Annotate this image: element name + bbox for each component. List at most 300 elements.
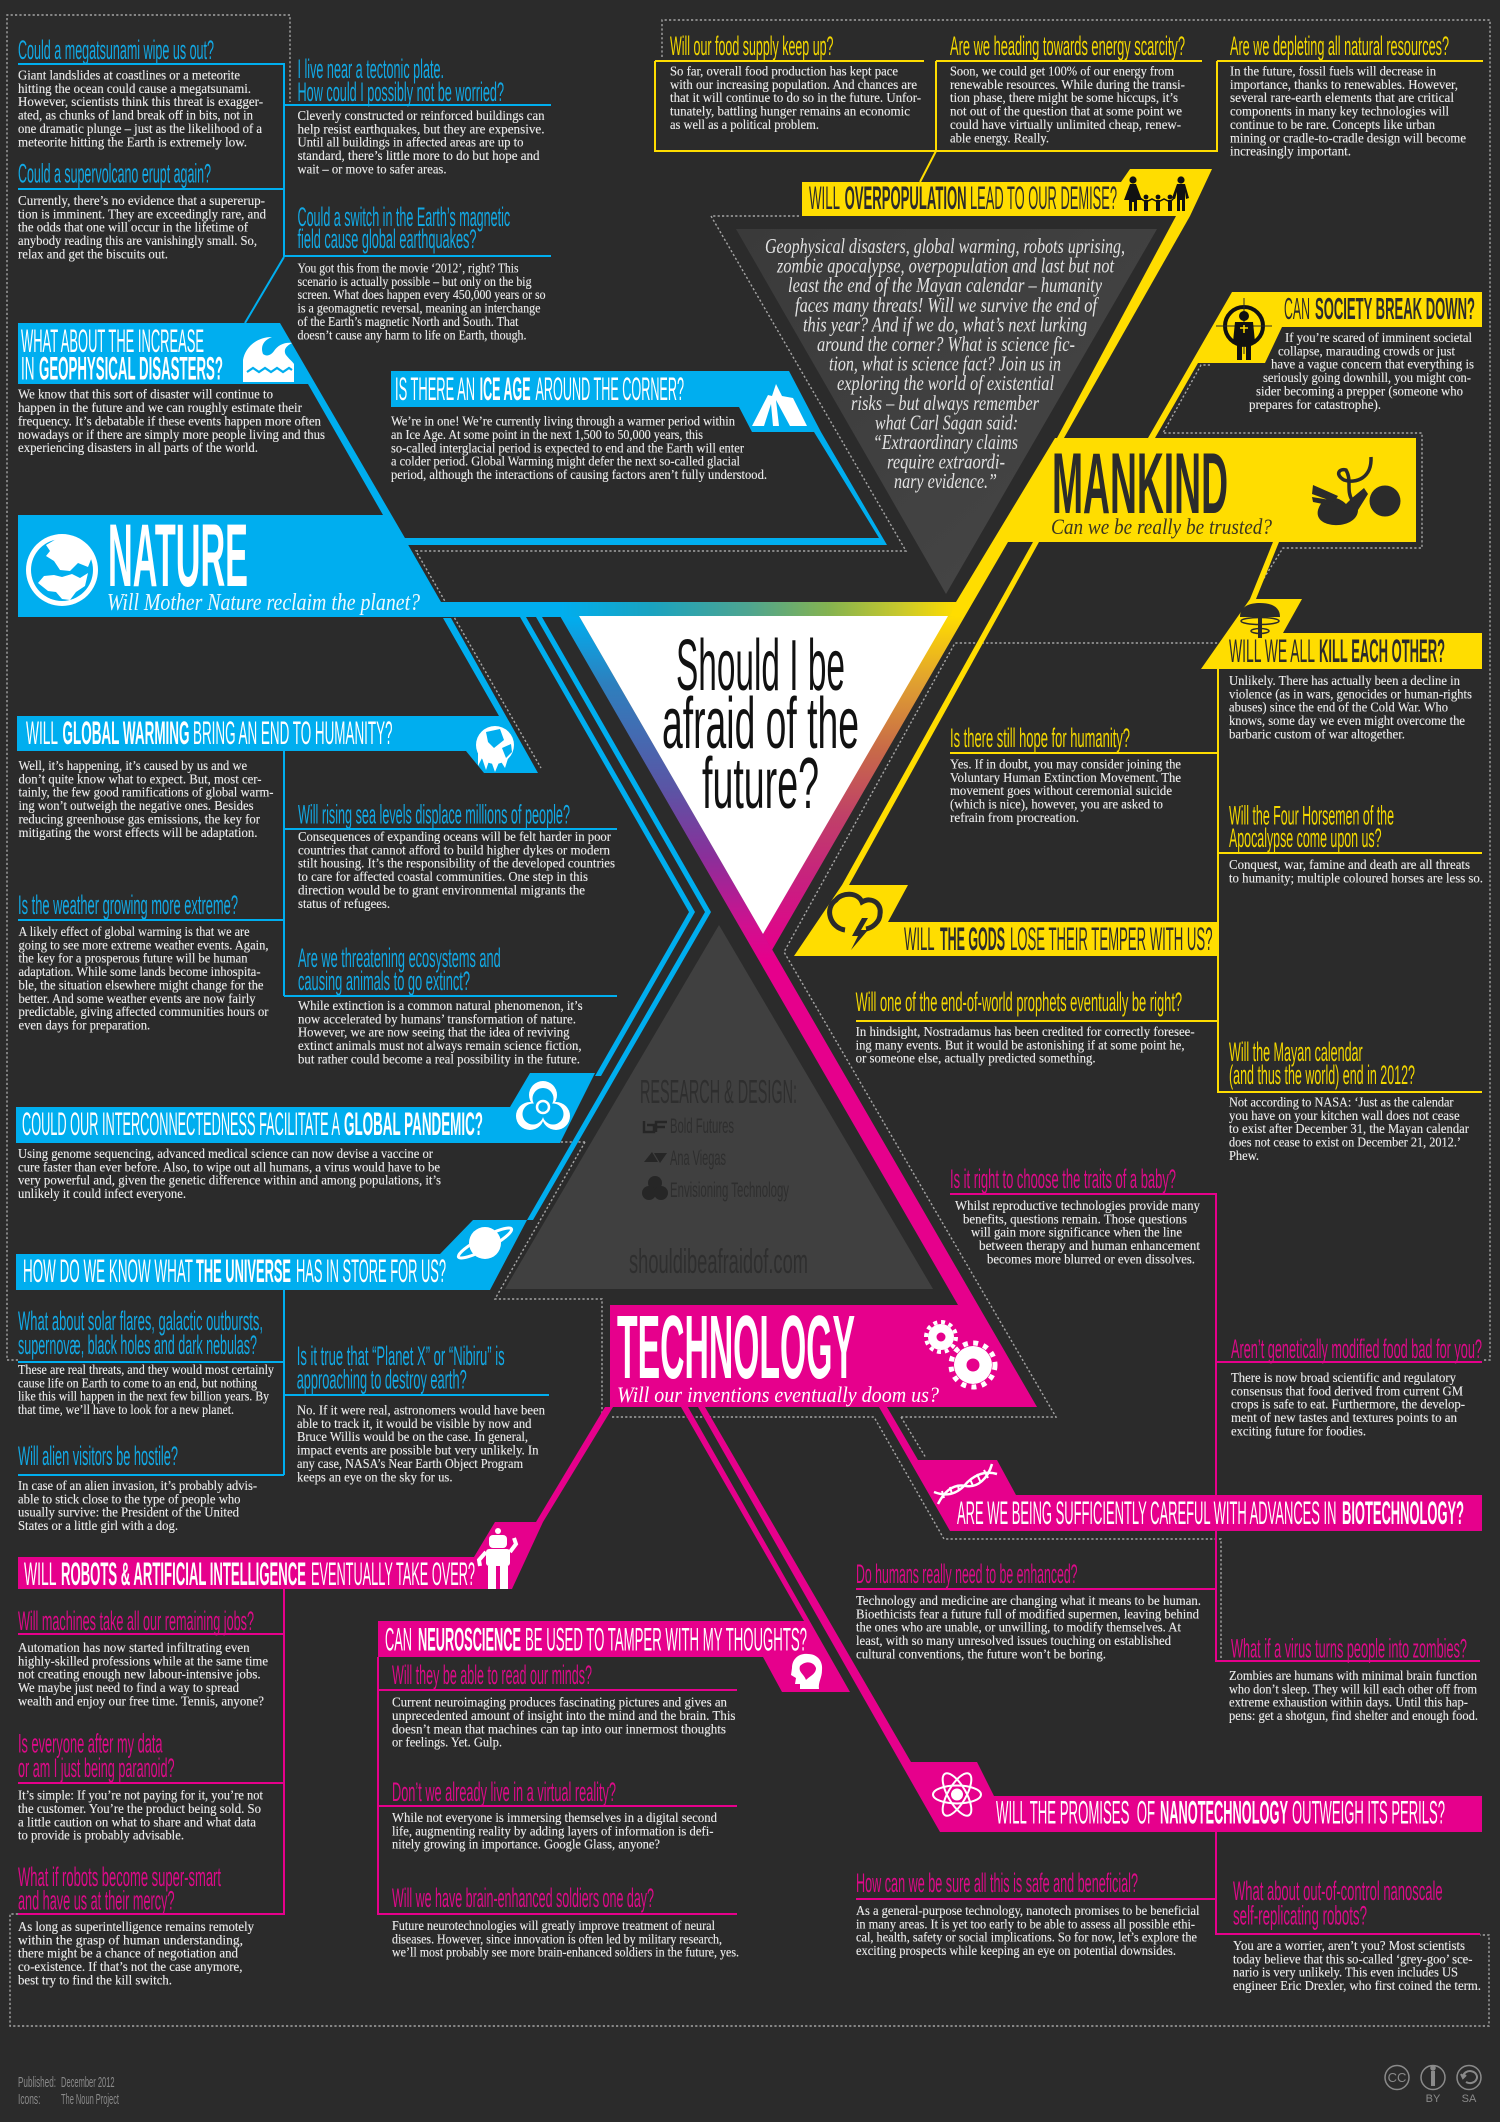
panel: zombies: extreme exhaustion within days. Until this hap- (1229, 1695, 1468, 1710)
panel: hope for humanity: Yes. If in doubt, you may consider joining the (950, 756, 1181, 772)
panel: robots: EVENTUALLY TAKE OVER? (311, 1556, 475, 1592)
panel: brain-enhanced soldiers (392, 1883, 739, 1960)
panel: tectonic plate: wait – or move to safer areas. (298, 161, 446, 176)
panel: rising sea levels: Consequences of expanding oceans will be felt harder in poor (298, 829, 612, 844)
panel: remaining jobs: highly-skilled professions while at the same time (18, 1653, 268, 1668)
panel: ice age: We’re in one! We’re currently living through a warmer period within (391, 414, 735, 429)
panel: remaining jobs: We maybe just need to find a way to spread (18, 1680, 239, 1695)
panel: ice age (391, 371, 887, 545)
panel: baby traits: benefits, questions remain. Those questions (963, 1211, 1187, 1226)
panel: hope for humanity: movement goes without ceremonial suicide (950, 783, 1172, 798)
panel: food supply: So far, overall food production has kept pace (670, 64, 898, 78)
panel: magnetic field switch: field cause global earthquakes? (298, 224, 476, 254)
icon: brain head (791, 1654, 822, 1689)
panel: solar flares (18, 1306, 274, 1417)
intro text: this year? And if we do, what’s next lurking (803, 312, 1087, 336)
panel: natural resources: importance, thanks to renewables. However, (1230, 77, 1458, 92)
panel: alien visitors: Will alien visitors be hostile? (18, 1441, 178, 1471)
panel: could a supervolcano erupt again: Could a supervolcano erupt again? (18, 158, 211, 188)
icon: envisioning technology (642, 1176, 668, 1200)
panel: could a megatsunami wipe us out (18, 35, 263, 149)
panel: energy scarcity (950, 31, 1185, 145)
panel: solar flares: What about solar flares, galactic outbursts, (18, 1306, 263, 1336)
footer: creative commons icons (1385, 2066, 1481, 2105)
icon: globe (26, 534, 98, 606)
text: BE USED TO TAMPER WITH MY THOUGHTS? (525, 1622, 807, 1658)
panel: rising sea levels: to care for affected coastal communities. One step in this (298, 869, 588, 884)
panel: virtual reality (392, 1777, 717, 1852)
panel: zombies: who don’t sleep. They will kill each other off from (1229, 1681, 1478, 1696)
panel: zombies (1229, 1634, 1478, 1723)
panel: my data: It’s simple: If you’re not paying for it, you’re not (18, 1788, 263, 1803)
panel: energy scarcity: not out of the question that at some point we (950, 104, 1182, 119)
panel: mayan calendar: does not cease to exist on December 21, 2012.’ (1229, 1135, 1461, 1150)
panel: virtual reality: While not everyone is immersing themselves in a digital second (392, 1810, 717, 1825)
panel: hope for humanity: (which is nice), however, you are asked to (950, 797, 1163, 812)
panel: global warming: don’t quite know what to expect. But, most cer- (18, 771, 262, 786)
footer: creative commons icons: CC (1388, 2070, 1406, 2085)
panel: credits: Bold Futures (670, 1115, 734, 1138)
panel: safe and beneficial: in many areas. It is yet too early to be able to assess all possible ethi- (856, 1916, 1195, 1931)
central frame: gradient triangle (441, 602, 1037, 1407)
panel: could a megatsunami wipe us out: meteorite hitting the Earth is extremely low. (18, 134, 247, 149)
chevron strips from nature (520, 617, 711, 1220)
panel: overpopulation: OVERPOPULATION (845, 180, 967, 216)
icon: storm cloud (830, 894, 880, 950)
panel: virtual reality: life, augmenting reality by adding layers of information is defi- (392, 1823, 714, 1838)
panel: threatened ecosystems: causing animals to go extinct? (298, 966, 470, 996)
panel: natural resources: components in many key technologies will (1230, 104, 1449, 119)
intro text: zombie apocalypse, overpopulation and last but not (776, 254, 1115, 278)
intro text: Geophysical disasters, global warming, robots uprising, (765, 234, 1125, 258)
footer: publication info: December 2012 (61, 2074, 115, 2091)
panel: baby traits (950, 1164, 1482, 1495)
panel: virtual reality: Don’t we already live in a virtual reality? (392, 1777, 616, 1807)
panel: threatened ecosystems: but rather could become a real possibility in the future. (298, 1051, 580, 1066)
panel: planet x: Bruce Willis would be on the case. In general, (297, 1429, 528, 1444)
panel: food supply (670, 31, 921, 132)
panel: biotechnology (856, 1407, 1482, 1661)
central white triangle with title: future? (702, 744, 819, 824)
panel: technology banner: TECHNOLOGY (617, 1298, 855, 1398)
footer: publication info: Published: (18, 2074, 56, 2091)
panel: super-smart robots: best try to find the kill switch. (18, 1972, 172, 1987)
panel: brain-enhanced soldiers: diseases. However, since innovation is often led by military research, (392, 1931, 722, 1946)
panel: tectonic plate: Until all buildings in affected areas are up to (298, 135, 524, 150)
panel: magnetic field switch: Could a switch in the Earth’s magnetic (298, 202, 510, 232)
panel: threatened ecosystems: However, we are now seeing that the idea of reviving (298, 1025, 570, 1040)
panel: global pandemic: very powerful and, given the genetic difference within and among populations, it’s (18, 1173, 441, 1188)
panel: planet x: impact events are possible but very unlikely. In (297, 1443, 539, 1458)
panel: ice age: a colder period. Global Warming might defer the next so-called glacial (391, 454, 740, 469)
panel: rising sea levels: stilt housing. It’s the responsibility of the developed countries (298, 856, 615, 871)
panel: end-of-world prophets: ing many events. But it would be astonishing if at some point he, (856, 1037, 1185, 1052)
intro text: risks – but always remember (851, 391, 1040, 415)
panel: neuroscience (378, 1407, 850, 1914)
intro text: what Carl Sagan said: (875, 410, 1018, 434)
panel: genetically modified food: crops is safe to eat. Furthermore, the develop- (1231, 1397, 1465, 1412)
panel: super-smart robots (18, 1862, 254, 1987)
panel: remaining jobs: Automation has now started infiltrating even (18, 1640, 250, 1655)
panel: extreme weather: Is the weather growing more extreme? (18, 890, 238, 920)
panel: mayan calendar (1229, 1037, 1470, 1163)
panel: can society break down (1148, 291, 1482, 438)
panel: can society break down: seriously going downhill, you might con- (1263, 370, 1471, 385)
panel: the universe (16, 1220, 549, 1475)
panel: could a supervolcano erupt again (18, 158, 266, 261)
panel: tectonic plate: standard, there’s little more to do but hope and (298, 148, 540, 163)
panel: self-replicating robots: nario is very unlikely. This even includes US (1233, 1965, 1458, 1980)
panel: read our minds: Current neuroimaging produces fascinating pictures and gives an (392, 1695, 727, 1710)
panel: can society break down: If you’re scared of imminent societal (1285, 330, 1472, 345)
panel: extreme weather: A likely effect of global warming is that we are (18, 924, 250, 939)
panel: safe and beneficial: cal, health, safety or social implications. So for now, let’s explore the (856, 1930, 1197, 1945)
panel: food supply: with our increasing population. And chances are (670, 77, 917, 92)
panel: food supply: as well as a political problem. (670, 117, 819, 132)
panel: threatened ecosystems: extinct animals must not always remain science fiction, (298, 1038, 582, 1053)
icon: ice mountain (752, 384, 807, 426)
panel: geophysical disasters: IN (21, 350, 34, 386)
panel: planet x: any case, NASA’s Near Earth Object Program (297, 1456, 524, 1471)
panel: threatened ecosystems: While extinction is a common natural phenomenon, it’s (298, 998, 583, 1013)
panel: do humans need to be enhanced: Do humans really need to be enhanced? (856, 1559, 1078, 1589)
panel: hope for humanity: Is there still hope for humanity? (950, 723, 1130, 753)
panel: do humans need to be enhanced: Technology and medicine are changing what it means to be human. (856, 1593, 1201, 1608)
intro text: least the end of the Mayan calendar – humanity (788, 273, 1103, 297)
panel: ice age: an Ice Age. At some point in the next 1,500 to 50,000 years, this (391, 427, 703, 442)
icon: bold futures (644, 1121, 667, 1132)
panel: can society break down: collapse, marauding crowds or just (1278, 343, 1455, 358)
panel: tectonic plate: I live near a tectonic plate. (298, 54, 444, 84)
panel: do humans need to be enhanced: cultural conventions, the future won’t be boring. (856, 1646, 1106, 1661)
icon: mushroom cloud (1240, 603, 1280, 638)
panel: could a megatsunami wipe us out: hitting the ocean could cause a megatsunami. (18, 81, 251, 96)
panel: read our minds (392, 1660, 736, 1750)
panel: rising sea levels (298, 800, 615, 911)
panel: brain-enhanced soldiers: Future neurotechnologies will greatly improve treatment of neural (392, 1918, 715, 1933)
panel: read our minds: doesn’t mean that machines can tap into our innermost thoughts (392, 1721, 726, 1736)
panel: natural resources: increasingly important. (1230, 144, 1351, 159)
panel: mankind banner (842, 436, 1416, 885)
panel: will we all kill each other (856, 599, 1482, 1092)
panel: baby traits: Whilst reproductive technologies provide many (955, 1198, 1200, 1213)
panel: natural resources (1230, 31, 1466, 159)
panel: magnetic field switch: scenario is actually possible – but only on the big (298, 274, 532, 289)
panel: super-smart robots: there might be a chance of negotiation and (18, 1946, 238, 1961)
panel: ice age: AROUND THE CORNER? (536, 371, 684, 407)
panel: geophysical disasters: GEOPHYSICAL DISASTERS? (39, 350, 223, 386)
panel: self-replicating robots: today believe that this so-called ‘grey-goo’ sce- (1233, 1951, 1472, 1966)
panel: geophysical disasters: frequency. It’s debatable if these events happen more often (18, 413, 321, 428)
credits triangle background (505, 925, 933, 1289)
panel: extreme weather: the key for a prosperous future will be human (18, 951, 248, 966)
panel: extreme weather: predictable, giving affected communities hours or (18, 1004, 269, 1019)
text: Are we heading towards energy scarcity? (950, 31, 1185, 61)
panel: will we all kill each other: violence (as in wars, genocides or human-rights (1229, 686, 1472, 701)
panel: planet x: approaching to destroy earth? (297, 1364, 467, 1394)
panel: mayan calendar: you have on your kitchen wall does not cease (1229, 1108, 1460, 1123)
panel: my data (18, 1729, 263, 1843)
panel: energy scarcity: able energy. Really. (950, 130, 1049, 145)
icon: dna (934, 1464, 997, 1504)
panel: remaining jobs: wealth and enjoy our free time. Tennis, anyone? (18, 1693, 264, 1708)
panel: magnetic field switch: doesn’t cause any harm to life on Earth, though. (298, 327, 526, 342)
panel: super-smart robots: and have us at their mercy? (18, 1885, 174, 1915)
panel: safe and beneficial: exciting prospects while keeping an eye on potential downsides. (856, 1943, 1176, 1958)
panel: the universe: HAS IN STORE FOR US? (296, 1253, 446, 1289)
panel: safe and beneficial: As a general-purpose technology, nanotech promises to be beneficial (856, 1903, 1200, 1918)
panel: zombies: pens: get a shotgun, find shelter and enough food. (1229, 1708, 1478, 1723)
panel: genetically modified food (1231, 1334, 1482, 1438)
panel: planet x: keeps an eye on the sky for us. (297, 1469, 452, 1484)
panel: do humans need to be enhanced (856, 1559, 1201, 1661)
panel: global warming: GLOBAL WARMING (62, 715, 190, 751)
panel: tectonic plate: help resist earthquakes, but they are expensive. (298, 121, 544, 136)
panel: nanotechnology: NANOTECHNOLOGY (1160, 1794, 1288, 1830)
intro text: around the corner? What is science fic- (817, 332, 1075, 356)
intro text: faces many threats! Will we survive the end of (795, 293, 1099, 317)
panel: global pandemic: COULD OUR INTERCONNECTEDNESS FACILITATE A (22, 1106, 340, 1142)
panel: geophysical disasters: experiencing disasters in all parts of the world. (18, 440, 258, 455)
panel: planet x: able to track it, it would be visible by now and (297, 1416, 532, 1431)
panel: the gods: WILL (904, 921, 935, 957)
panel: mankind banner: MANKIND (1052, 436, 1228, 532)
panel: genetically modified food: exciting future for foodies. (1231, 1423, 1366, 1438)
panel: geophysical disasters: nowadays or if there are simply more people living and thus (18, 427, 325, 442)
icon: fetus (1312, 457, 1400, 525)
panel: safe and beneficial: How can we be sure all this is safe and beneficial? (856, 1868, 1138, 1898)
panel: nature banner: NATURE (108, 505, 248, 605)
panel: threatened ecosystems (298, 943, 583, 1066)
panel: food supply: that it will continue to do so in the future. Unfor- (670, 90, 921, 105)
panel: global warming (17, 618, 617, 996)
panel: could a supervolcano erupt again: Currently, there’s no evidence that a supererup- (18, 193, 265, 208)
panel: will we all kill each other: barbaric custom of war altogether. (1229, 726, 1405, 741)
panel: hope for humanity: refrain from procreation. (950, 810, 1079, 825)
panel: could a megatsunami wipe us out: Giant landslides at coastlines or a meteorite (18, 68, 240, 82)
panel: threatened ecosystems: now accelerated by humans’ transformation of nature. (298, 1011, 576, 1026)
panel: genetically modified food: ment of new tastes and textures points to an (1231, 1410, 1457, 1425)
panel: extreme weather: ble, the situation elsewhere might change for the (18, 977, 264, 992)
panel: self-replicating robots: engineer Eric Drexler, who first coined the term. (1233, 1978, 1481, 1993)
panel: global warming: reducing greenhouse gas emissions, the key for (18, 811, 261, 826)
text: supernovæ, black holes and dark nebulas? (18, 1330, 257, 1360)
icon: target person (1216, 298, 1272, 360)
panel: extreme weather: adaptation. While some lands become inhospita- (18, 964, 260, 979)
panel: super-smart robots: within the grasp of human understanding, (18, 1932, 243, 1947)
panel: four horsemen (1229, 800, 1483, 885)
panel: technology banner (610, 1298, 1037, 1407)
panel: tectonic plate (298, 54, 545, 176)
icon: biohazard (516, 1081, 570, 1130)
panel: natural resources: mining or cradle-to-cradle design will become (1230, 130, 1466, 145)
icon: saturn (456, 1224, 514, 1262)
panel: global warming: tainly, the few good ramifications of global warm- (18, 785, 274, 800)
panel: brain-enhanced soldiers: Will we have brain-enhanced soldiers one day? (392, 1883, 654, 1913)
panel: magnetic field switch: You got this from the movie ‘2012’, right? This (298, 260, 518, 276)
panel: extreme weather (18, 890, 269, 1032)
panel: planet x: No. If it were real, astronomers would have been (297, 1402, 545, 1418)
panel: read our minds: or feelings. Yet. Gulp. (392, 1735, 502, 1750)
panel: self-replicating robots (1233, 1876, 1481, 1993)
panel: credits: Envisioning Technology (670, 1179, 789, 1202)
panel: food supply: tunately, battling hunger remains an economic (670, 104, 910, 119)
text: Will machines take all our remaining jobs? (18, 1606, 254, 1636)
footer: creative commons icons: BY (1426, 2093, 1441, 2105)
panel: the universe: THE UNIVERSE (196, 1253, 291, 1289)
intro text: “Extraordinary claims (873, 430, 1018, 454)
panel: will we all kill each other: WILL WE ALL (1229, 633, 1315, 669)
panel: end-of-world prophets: or someone else, actually predicted something. (856, 1051, 1096, 1066)
panel: could a megatsunami wipe us out: ated, as chunks of land break off in bits, not in (18, 108, 253, 123)
panel: global pandemic: GLOBAL PANDEMIC? (344, 1106, 483, 1142)
panel: natural resources: continue to be rare. Concepts like urban (1230, 117, 1435, 132)
panel: baby traits: will gain more significance when the line (971, 1225, 1182, 1240)
panel: my data: a little caution on what to share and what data (18, 1814, 256, 1829)
panel: my data: Is everyone after my data (18, 1729, 163, 1759)
panel: global warming: BRING AN END TO HUMANITY? (193, 715, 392, 751)
panel: the gods (794, 885, 1218, 957)
panel: magnetic field switch: screen. What does happen every 450,000 years or so (298, 287, 546, 302)
panel: can society break down: CAN (1284, 291, 1310, 326)
panel: do humans need to be enhanced: least, with so many unresolved issues touching on established (856, 1633, 1171, 1648)
panel: ice age: so-called interglacial period is expected to end and the Earth will enter (391, 440, 745, 455)
panel: global pandemic: Using genome sequencing, advanced medical science can now devise a vaccine or (18, 1146, 434, 1161)
panel: global pandemic: unlikely it could infect everyone. (18, 1186, 186, 1201)
subtitle: mankind: Can we be really be trusted? (1051, 514, 1272, 539)
panel: super-smart robots: As long as superintelligence remains remotely (18, 1919, 254, 1934)
panel: genetically modified food: consensus that food derived from current GM (1231, 1383, 1463, 1398)
panel: rising sea levels: countries that cannot afford to build higher dykes or modern (298, 842, 610, 857)
panel: extreme weather: better. And some weather events are now fairly (18, 991, 256, 1006)
footer: creative commons icons: SA (1462, 2093, 1477, 2105)
panel: planet x (297, 1341, 545, 1484)
panel: credits: shouldibeafraidof.com (629, 1243, 808, 1281)
panel: magnetic field switch (298, 202, 546, 342)
icon: melting globe (476, 726, 514, 772)
central white triangle with title: afraid of the (662, 684, 859, 764)
panel: energy scarcity: renewable resources. While during the transi- (950, 77, 1185, 92)
text: LOSE THEIR TEMPER WITH US? (1010, 921, 1212, 957)
panel: could a supervolcano erupt again: relax and get the biscuits out. (18, 246, 168, 261)
panel: extreme weather: even days for preparation. (18, 1018, 150, 1032)
panel: read our minds: Will they be able to read our minds? (392, 1660, 592, 1690)
footer: publication info: Icons: (18, 2091, 40, 2108)
panel: my data: to provide is probably advisable. (18, 1828, 184, 1843)
panel: nanotechnology (698, 1407, 1482, 1934)
footer: publication info (18, 2074, 119, 2108)
panel: zombies: Zombies are humans with minimal brain function (1229, 1668, 1477, 1683)
panel: robots: ROBOTS & ARTIFICIAL INTELLIGENCE (61, 1556, 306, 1592)
panel: rising sea levels: Will rising sea levels displace millions of people? (298, 800, 570, 830)
panel: global warming: Well, it’s happening, it’s caused by us and we (18, 758, 247, 773)
icon: robot (479, 1528, 516, 1589)
panel: the universe: HOW DO WE KNOW WHAT (23, 1253, 193, 1289)
panel: could a supervolcano erupt again: the odds that one will occur in the lifetime of (18, 220, 249, 235)
panel: global warming: mitigating the worst effects will be adaptation. (18, 825, 258, 840)
panel: mayan calendar: Not according to NASA: ‘Just as the calendar (1229, 1094, 1454, 1110)
icon: gears (926, 1322, 995, 1387)
panel: remaining jobs: not creating enough new labour-intensive jobs. (18, 1667, 261, 1682)
panel: global pandemic: cure faster than ever before. Also, to wipe out all humans, a virus would have to be (18, 1159, 440, 1174)
panel: do humans need to be enhanced: Bioethicists fear a future full of modified supermen, leaving behind (856, 1606, 1199, 1621)
central white triangle with title: Should I be (676, 626, 845, 706)
footer: publication info: The Noun Project (61, 2091, 119, 2108)
panel: overpopulation: LEAD TO OUR DEMISE? (970, 180, 1117, 216)
panel: energy scarcity: Soon, we could get 100% of our energy from (950, 64, 1175, 78)
panel: magnetic field switch: is a geomagnetic reversal, meaning an interchange (298, 301, 541, 316)
panel: safe and beneficial (856, 1868, 1200, 1958)
panel: can society break down: sider becoming a prepper (someone who (1256, 383, 1463, 398)
panel: tectonic plate: Cleverly constructed or reinforced buildings can (298, 108, 545, 123)
panel: geophysical disasters: WHAT ABOUT THE INCREASE (21, 323, 204, 359)
subtitle: technology: Will our inventions eventually doom us? (617, 1382, 939, 1407)
intro text (765, 234, 1125, 493)
panel: neuroscience: CAN (385, 1622, 412, 1658)
panel: super-smart robots: What if robots become super-smart (18, 1862, 221, 1892)
panel: virtual reality: nitely growing in importance. Google Glass, anyone? (392, 1837, 660, 1852)
panel: brain-enhanced soldiers: we’ll most probably see more brain-enhanced soldiers in the future, yes. (392, 1945, 739, 1960)
panel: baby traits: between therapy and human enhancement (979, 1238, 1200, 1253)
panel: geophysical disasters (18, 323, 409, 545)
panel: overpopulation (655, 61, 1483, 438)
panel: magnetic field switch: of the Earth’s magnetic North and South. That (298, 314, 519, 329)
panel: nature banner (18, 505, 560, 617)
panel: could a supervolcano erupt again: tion is imminent. They are exceedingly rare, and (18, 206, 266, 221)
panel: the gods: THE GODS (940, 921, 1005, 957)
icon: ana viegas (644, 1152, 667, 1163)
panel: tectonic plate: How could I possibly not be worried? (298, 77, 504, 107)
panel: rising sea levels: direction would be to grant environmental migrants the (298, 882, 585, 897)
panel: global pandemic (16, 1073, 595, 1201)
panel: ice age: period, although the interactions of causing factors aren’t fully understood. (391, 467, 767, 482)
panel: global warming: WILL (26, 715, 58, 751)
icon: waves (243, 337, 294, 382)
panel: read our minds: unprecedented amount of insight into the mind and the brain. This (392, 1708, 736, 1723)
panel: solar flares: like this will happen in the next few billion years. By (18, 1389, 269, 1404)
panel: hope for humanity: Voluntary Human Extinction Movement. The (950, 770, 1181, 785)
panel: food supply: Will our food supply keep up? (670, 31, 834, 61)
panel: will we all kill each other: abuses) since the end of the Cold War. Who (1229, 700, 1448, 715)
text: RESEARCH & DESIGN: (640, 1073, 797, 1110)
panel: mayan calendar: to exist after December 31, the Mayan calendar (1229, 1121, 1470, 1136)
panel: energy scarcity: tion phase, there might be some hiccups, it’s (950, 90, 1178, 105)
panel: super-smart robots: co-existence. If that’s not the case anymore, (18, 1959, 242, 1974)
panel: ice age: ICE AGE (480, 371, 531, 407)
panel: overpopulation: WILL (809, 180, 840, 216)
panel: four horsemen: Conquest, war, famine and death are all threats (1229, 857, 1470, 872)
panel: planet x: Is it true that “Planet X” or “Nibiru” is (297, 1341, 505, 1371)
panel: could a megatsunami wipe us out: one dramatic plunge – just as the likelihood of a (18, 121, 262, 136)
panel: energy scarcity: could have virtually unlimited cheap, renew- (950, 117, 1181, 132)
panel: geophysical disasters connectors (18, 64, 551, 323)
intro text: nary evidence.” (894, 469, 997, 493)
panel: could a megatsunami wipe us out: Could a megatsunami wipe us out? (18, 35, 214, 65)
panel: will we all kill each other: Unlikely. There has actually been a decline in (1229, 673, 1460, 688)
panel: alien visitors: In case of an alien invasion, it’s probably advis- (18, 1478, 257, 1493)
panel: can society break down: have a vague concern that everything is (1271, 357, 1474, 372)
panel: ice age: IS THERE AN (395, 371, 475, 407)
panel: mayan calendar: Phew. (1229, 1148, 1259, 1163)
panel: remaining jobs (18, 1606, 268, 1708)
panel: do humans need to be enhanced: the ones who are unable, or unwilling, to modify themselves. At (856, 1620, 1181, 1635)
panel: could a megatsunami wipe us out: However, scientists think this threat is exagger- (18, 94, 263, 109)
panel: geophysical disasters: happen in the future and we can roughly estimate their (18, 400, 303, 415)
panel: rising sea levels: status of refugees. (298, 896, 390, 911)
panel: self-replicating robots: You are a worrier, aren’t you? Most scientists (1233, 1938, 1465, 1953)
panel: end-of-world prophets: In hindsight, Nostradamus has been credited for correctly foresee- (856, 1024, 1195, 1039)
panel: robots (18, 1407, 613, 1914)
